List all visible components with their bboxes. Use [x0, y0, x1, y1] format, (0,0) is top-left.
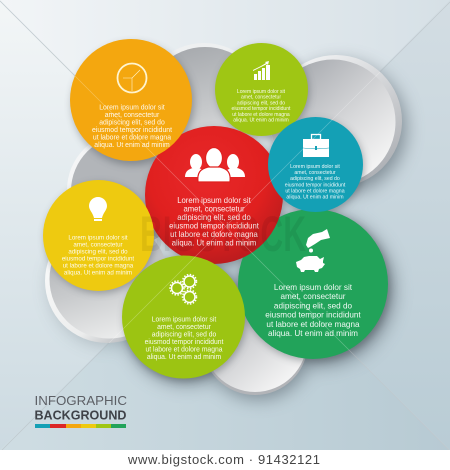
- circle shadows: [45, 43, 390, 381]
- footer band: www.bigstock.com · 91432121: [127, 452, 320, 467]
- text: large lime circle: Lorem ipsum dolor sit: [152, 316, 216, 324]
- text: orange circle: eiusmod tempor incididunt: [92, 126, 172, 134]
- text: small lime circle: eiusmod tempor incididunt: [232, 106, 291, 112]
- text: yellow circle: eiusmod tempor incididunt: [62, 255, 134, 263]
- panel: small lime circle: [215, 43, 308, 136]
- text: teal circle: Lorem ipsum dolor sit: [290, 164, 340, 170]
- text: green circle: ut labore et dolore magna: [266, 319, 360, 329]
- icon: briefcase: [303, 134, 329, 157]
- text: large lime circle: eiusmod tempor incididunt: [145, 339, 223, 346]
- watermark: BIGSTOCK: [140, 206, 306, 262]
- icon: people: [185, 148, 245, 182]
- text: yellow circle: [62, 234, 134, 277]
- text: green circle: adipiscing elit, sed do: [274, 300, 352, 310]
- text: green circle: amet, consectetur: [281, 291, 346, 301]
- title: BACKGROUND: [34, 408, 126, 422]
- text: yellow circle: amet, consectetur: [73, 241, 123, 249]
- text: green circle: [265, 282, 361, 338]
- text: large lime circle: aliqua. Ut enim ad minim: [147, 354, 221, 361]
- text: red circle: ut labore et dolore magna: [170, 230, 258, 239]
- panel: green circle: [238, 209, 388, 359]
- text: small lime circle: ut labore et dolore magna: [232, 112, 290, 118]
- colour bar legend: [35, 424, 126, 428]
- text: orange circle: Lorem ipsum dolor sit: [99, 103, 165, 112]
- grey circle: bottom left: [45, 219, 169, 343]
- grey circles behind: [45, 43, 402, 395]
- text: red circle: adipiscing elit, sed do: [177, 213, 251, 222]
- text: small lime circle: aliqua. Ut enim ad minim: [233, 117, 289, 124]
- panel: orange circle: [70, 39, 192, 161]
- text: small lime circle: amet, consectetur: [241, 95, 281, 101]
- footer band: [0, 450, 450, 470]
- text: small lime circle: adipiscing elit, sed do: [237, 100, 285, 106]
- soft shadow under circle cluster: [50, 62, 406, 399]
- text: teal circle: eiusmod tempor incididunt: [285, 182, 346, 188]
- panel: teal circle: [268, 117, 363, 212]
- text: red circle: eiusmod tempor incididunt: [169, 221, 260, 231]
- text: large lime circle: ut labore et dolore magna: [146, 346, 223, 354]
- title: INFOGRAPHIC: [34, 393, 127, 408]
- text: teal circle: ut labore et dolore magna: [285, 188, 345, 194]
- grey circle: middle left: [67, 132, 183, 248]
- grey circle: bottom: [202, 288, 308, 395]
- text: small lime circle: Lorem ipsum dolor sit: [237, 89, 286, 95]
- icon: clock: [118, 64, 146, 92]
- icon: bar chart: [253, 61, 270, 80]
- text: orange circle: ut labore et dolore magna: [93, 133, 171, 142]
- text: teal circle: adipiscing elit, sed do: [290, 176, 340, 182]
- text: large lime circle: adipiscing elit, sed do: [152, 331, 216, 339]
- text: teal circle: [285, 164, 346, 201]
- panel: yellow circle: [43, 180, 154, 291]
- text: large lime circle: amet, consectetur: [157, 324, 211, 331]
- grey circle: top right: [270, 55, 402, 187]
- text: yellow circle: adipiscing elit, sed do: [68, 248, 128, 256]
- icon: hand and piggy bank: [296, 229, 330, 272]
- text: red circle: Lorem ipsum dolor sit: [177, 196, 252, 205]
- text: teal circle: amet, consectetur: [294, 170, 336, 176]
- grey circle: top centre: [141, 43, 267, 169]
- panel: red circle: [145, 126, 283, 264]
- text: green circle: Lorem ipsum dolor sit: [274, 282, 353, 292]
- text: red circle: amet, consectetur: [183, 204, 245, 214]
- text: orange circle: amet, consectetur: [105, 111, 160, 119]
- text: teal circle: aliqua. Ut enim ad minim: [286, 194, 344, 201]
- icon: gears: [170, 274, 196, 304]
- icon: light bulb: [89, 197, 107, 221]
- panel: large lime circle: [122, 256, 245, 378]
- text: orange circle: aliqua. Ut enim ad minim: [94, 141, 170, 149]
- title: [34, 393, 127, 422]
- text: green circle: aliqua. Ut enim ad minim: [268, 328, 358, 338]
- text: orange circle: [92, 103, 172, 149]
- text: red circle: [169, 196, 260, 248]
- text: orange circle: adipiscing elit, sed do: [99, 118, 165, 127]
- text: yellow circle: Lorem ipsum dolor sit: [68, 234, 128, 242]
- text: small lime circle: [232, 89, 291, 124]
- text: red circle: aliqua. Ut enim ad minim: [172, 238, 257, 248]
- text: large lime circle: [145, 316, 223, 361]
- text: yellow circle: aliqua. Ut enim ad minim: [64, 269, 132, 277]
- text: yellow circle: ut labore et dolore magna: [63, 262, 134, 270]
- text: green circle: eiusmod tempor incididunt: [265, 309, 361, 320]
